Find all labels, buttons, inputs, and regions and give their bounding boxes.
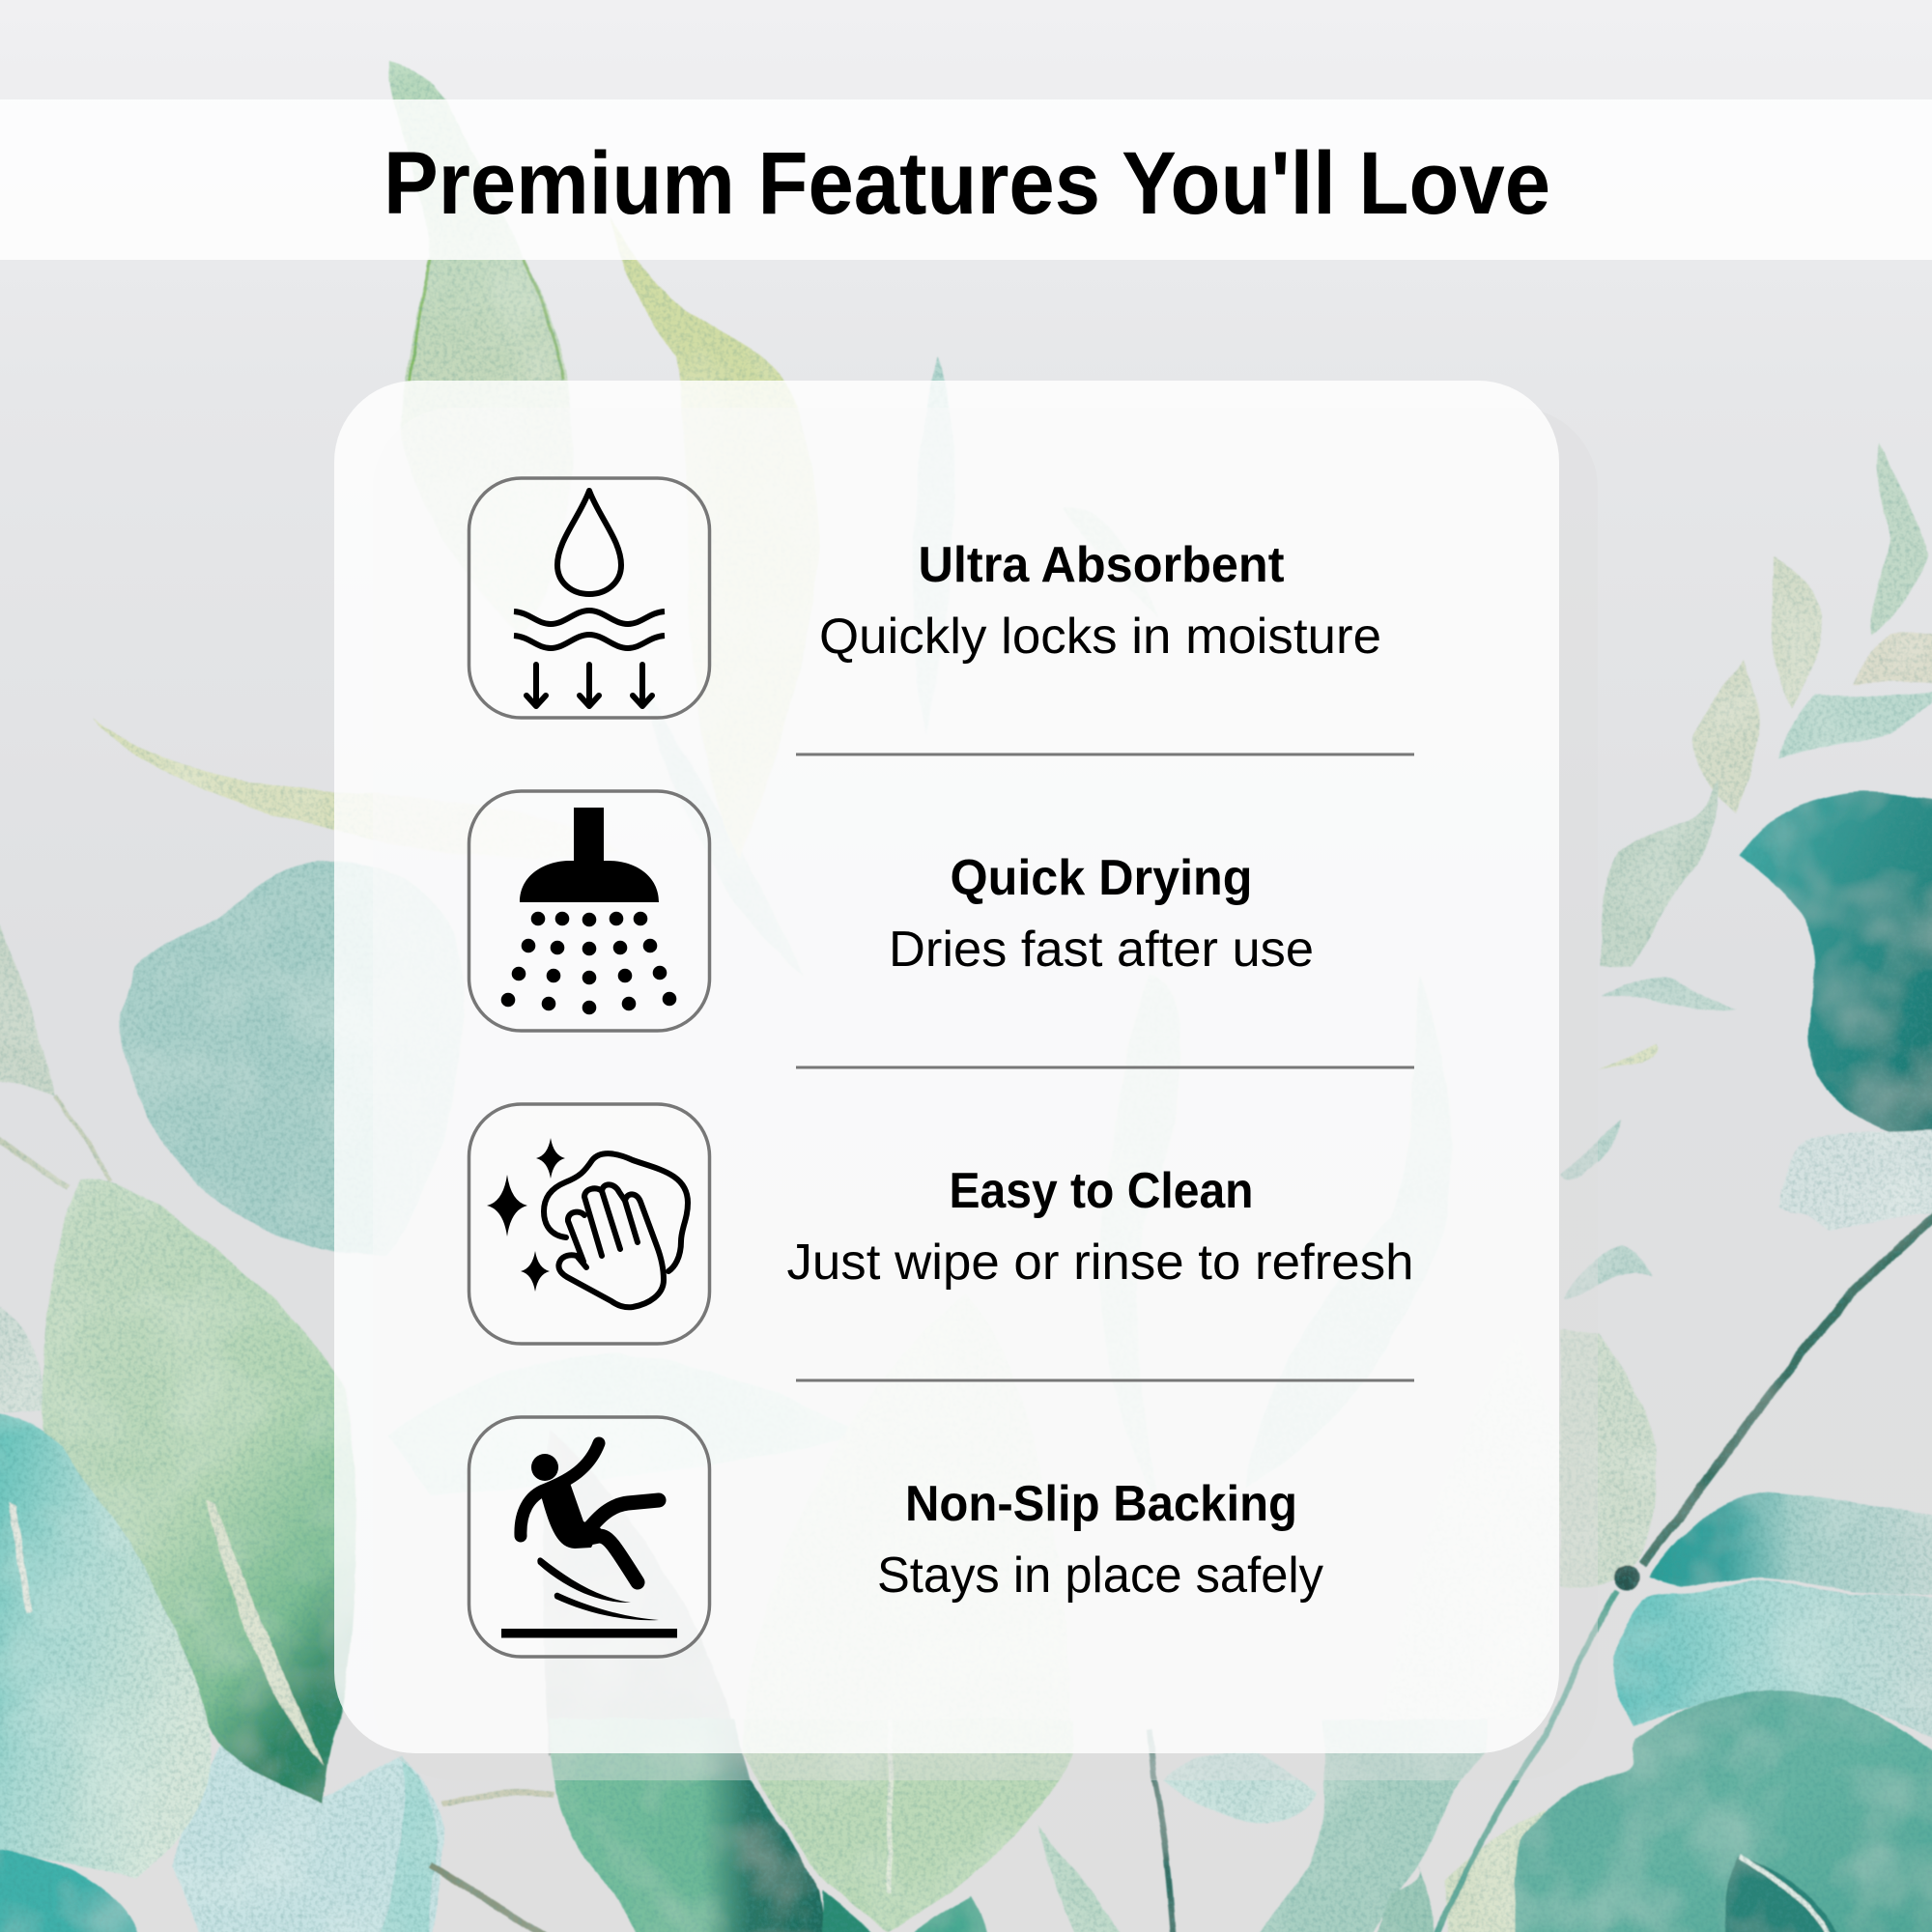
title: Premium Features You'll Love bbox=[384, 134, 1550, 233]
top green leaf bbox=[388, 62, 573, 638]
panel: frosted feature card bbox=[334, 381, 1559, 1753]
icon: person slipping bbox=[469, 1417, 709, 1657]
pale blue leaf bbox=[172, 1743, 444, 1932]
centre bottom leaves bbox=[1249, 1719, 1487, 1932]
feature row: quick drying bbox=[469, 791, 1314, 1031]
pale leaf right bbox=[1779, 1129, 1932, 1231]
teal grey round leaf bbox=[120, 862, 463, 1256]
big teal leaf upper right bbox=[1739, 792, 1932, 1132]
icon: water drop absorbing bbox=[469, 478, 709, 718]
bottom dark green leaf bbox=[548, 1719, 829, 1932]
teal large leaf bbox=[0, 1410, 211, 1878]
green beige large leaf bbox=[43, 1179, 356, 1803]
main stem bbox=[1642, 1206, 1932, 1565]
feature description: Quickly locks in moisture bbox=[819, 609, 1381, 665]
feature row: easy to clean bbox=[469, 1104, 1414, 1344]
feature heading: Easy to Clean bbox=[949, 1163, 1254, 1219]
feature heading: Non-Slip Backing bbox=[905, 1476, 1297, 1532]
bright teal corner leaf bbox=[0, 1847, 142, 1932]
icon: hand wiping with sparkles bbox=[469, 1104, 709, 1344]
small teal leaves at bottom bbox=[822, 1890, 883, 1932]
yellow green leaf bbox=[611, 215, 819, 860]
yellow sweep leaf bbox=[93, 718, 618, 858]
feature row: non-slip backing bbox=[469, 1417, 1323, 1657]
upper right small leaves bbox=[1871, 443, 1927, 635]
stems bottom left bbox=[431, 1865, 554, 1932]
feature description: Dries fast after use bbox=[889, 922, 1314, 978]
bottom pale green leaf bbox=[744, 1719, 1074, 1932]
panel: soft offset backing card bbox=[373, 408, 1598, 1780]
leaves under the panel bbox=[388, 1354, 863, 1495]
left pale leaves and stems bbox=[0, 898, 55, 1095]
right teal leaves at node bbox=[1649, 1492, 1932, 1595]
feature description: Stays in place safely bbox=[877, 1548, 1323, 1604]
title band bbox=[0, 99, 1932, 260]
feature heading: Quick Drying bbox=[951, 850, 1252, 906]
big green teal leaf bottom right bbox=[1514, 1690, 1932, 1932]
feature description: Just wipe or rinse to refresh bbox=[786, 1235, 1414, 1291]
icon: shower head bbox=[469, 791, 709, 1031]
feature heading: Ultra Absorbent bbox=[918, 537, 1285, 593]
feature row: ultra absorbent bbox=[469, 478, 1381, 718]
